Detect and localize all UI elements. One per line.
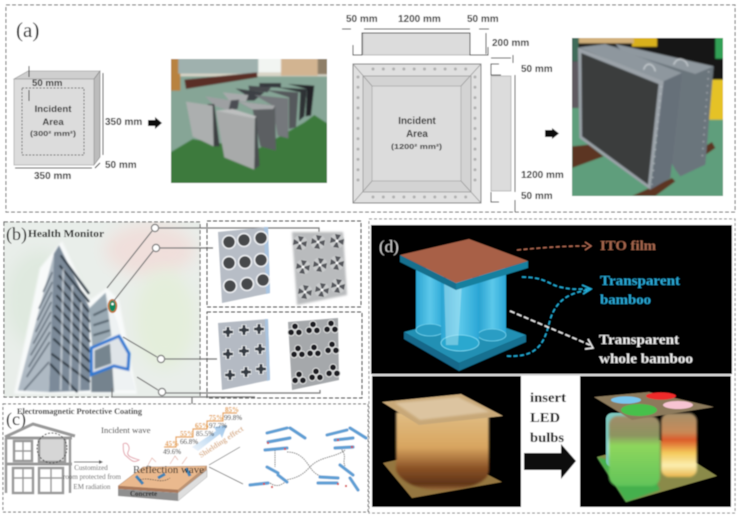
shielding staircase: 97.7% [209,422,227,430]
building illustration [14,241,137,394]
icon: health sensor [108,299,117,313]
arrow and caption: room protected from [63,473,122,481]
zoom lines [209,447,243,484]
label: ITO film: ITO film [600,238,657,253]
metasurface: pinwheels [292,232,347,305]
shielding staircase: 85% [225,406,239,414]
label: (c): (c) [6,409,26,430]
arrow and caption [63,460,122,491]
connectors [107,224,320,414]
shielding staircase: 75% [209,414,223,422]
label: Transparent whole bamboo: Transparent [599,333,679,348]
arrow and caption: Customized [74,464,108,472]
label: Transparent bamboo [600,274,680,308]
icon: incident wave squiggle [123,443,139,461]
panel: b [4,221,362,414]
arrow: transparent bamboo 2 [507,290,590,356]
label: reflection wave: Reflection wave [133,465,204,476]
label: insert LED bulbs: LED [530,411,560,426]
icon: house [5,424,75,493]
label: insert LED bulbs [530,391,566,446]
top trough drawing [342,14,529,55]
shielding staircase: 55% [180,430,194,438]
panel: c [3,404,368,512]
label: (d): (d) [379,237,399,256]
photo: unlit device [372,376,521,507]
arrow and caption: EM radiation [73,483,111,491]
shielding staircase: 45% [165,440,179,448]
small specimen drawing: 50 mm [105,160,137,171]
top trough drawing: 50 mm [346,14,378,25]
coating slab: Concrete [130,490,157,498]
section drawing: 1200 mm [521,170,564,181]
photo: small panels [168,56,331,187]
top trough drawing: 200 mm [492,38,529,49]
top trough drawing: 50 mm [467,14,499,25]
small specimen drawing [14,66,142,182]
shielding staircase: 66.8% [180,438,198,446]
coating slab [118,456,207,501]
label: insert LED bulbs: insert [530,391,566,406]
label: (b): (b) [6,224,27,245]
shielding staircase: 65% [195,422,209,430]
bamboo device [400,239,528,371]
label: Transparent whole bamboo [599,333,693,367]
small specimen drawing: 50 mm [32,78,62,89]
small specimen drawing: 350 mm [34,171,71,182]
schematic background [371,225,732,374]
large specimen drawing: (1200² mm²) [391,142,443,151]
metasurface: circles [218,227,270,303]
label: Transparent whole bamboo: whole bamboo [599,352,693,367]
small specimen drawing: (300² mm²) [30,129,77,138]
photo: large panels [569,35,727,200]
label: (a): (a) [16,18,39,42]
shielding staircase: 85.5% [196,430,214,438]
small specimen drawing: Incident [35,104,72,115]
shielding arrow [192,425,227,451]
small specimen drawing: 350 mm [105,117,142,128]
arrow: insert [524,444,576,479]
building background [4,222,200,397]
label: insert LED bulbs: bulbs [530,431,565,446]
shielding staircase [163,406,242,456]
small specimen drawing: Area [42,117,64,128]
polymer network [250,428,366,490]
panel: d [369,219,735,513]
label: Transparent bamboo: Transparent [600,274,680,289]
photo: lit device [580,376,731,507]
large specimen drawing [353,64,481,203]
shielding staircase: 99.8% [224,414,242,422]
large specimen drawing: Incident [398,116,437,127]
panel: a [6,5,735,212]
heading: Health Monitor: Health Monitor [28,228,104,240]
heading: Electromagnetic Protective Coating [17,407,143,416]
large specimen drawing: Area [406,129,428,140]
metasurface: trefoils [288,318,340,390]
section drawing: 50 mm [521,64,553,75]
section drawing [491,55,564,212]
label: shielding effect: Shielding effect [197,424,245,460]
arrow: specimen to photo [148,117,162,129]
section drawing: 50 mm [521,191,553,202]
arrow: section to photo [545,128,559,139]
label: incident wave: Incident wave [101,425,151,435]
label: Transparent bamboo: bamboo [600,293,651,308]
top trough drawing: 1200 mm [398,14,441,25]
arrow: transparent bamboo 1 [522,277,591,294]
arrow: whole bamboo [510,311,593,349]
metasurface: crosses [218,319,270,390]
shielding staircase: 49.6% [163,448,181,456]
arrow: ITO film [517,242,591,250]
